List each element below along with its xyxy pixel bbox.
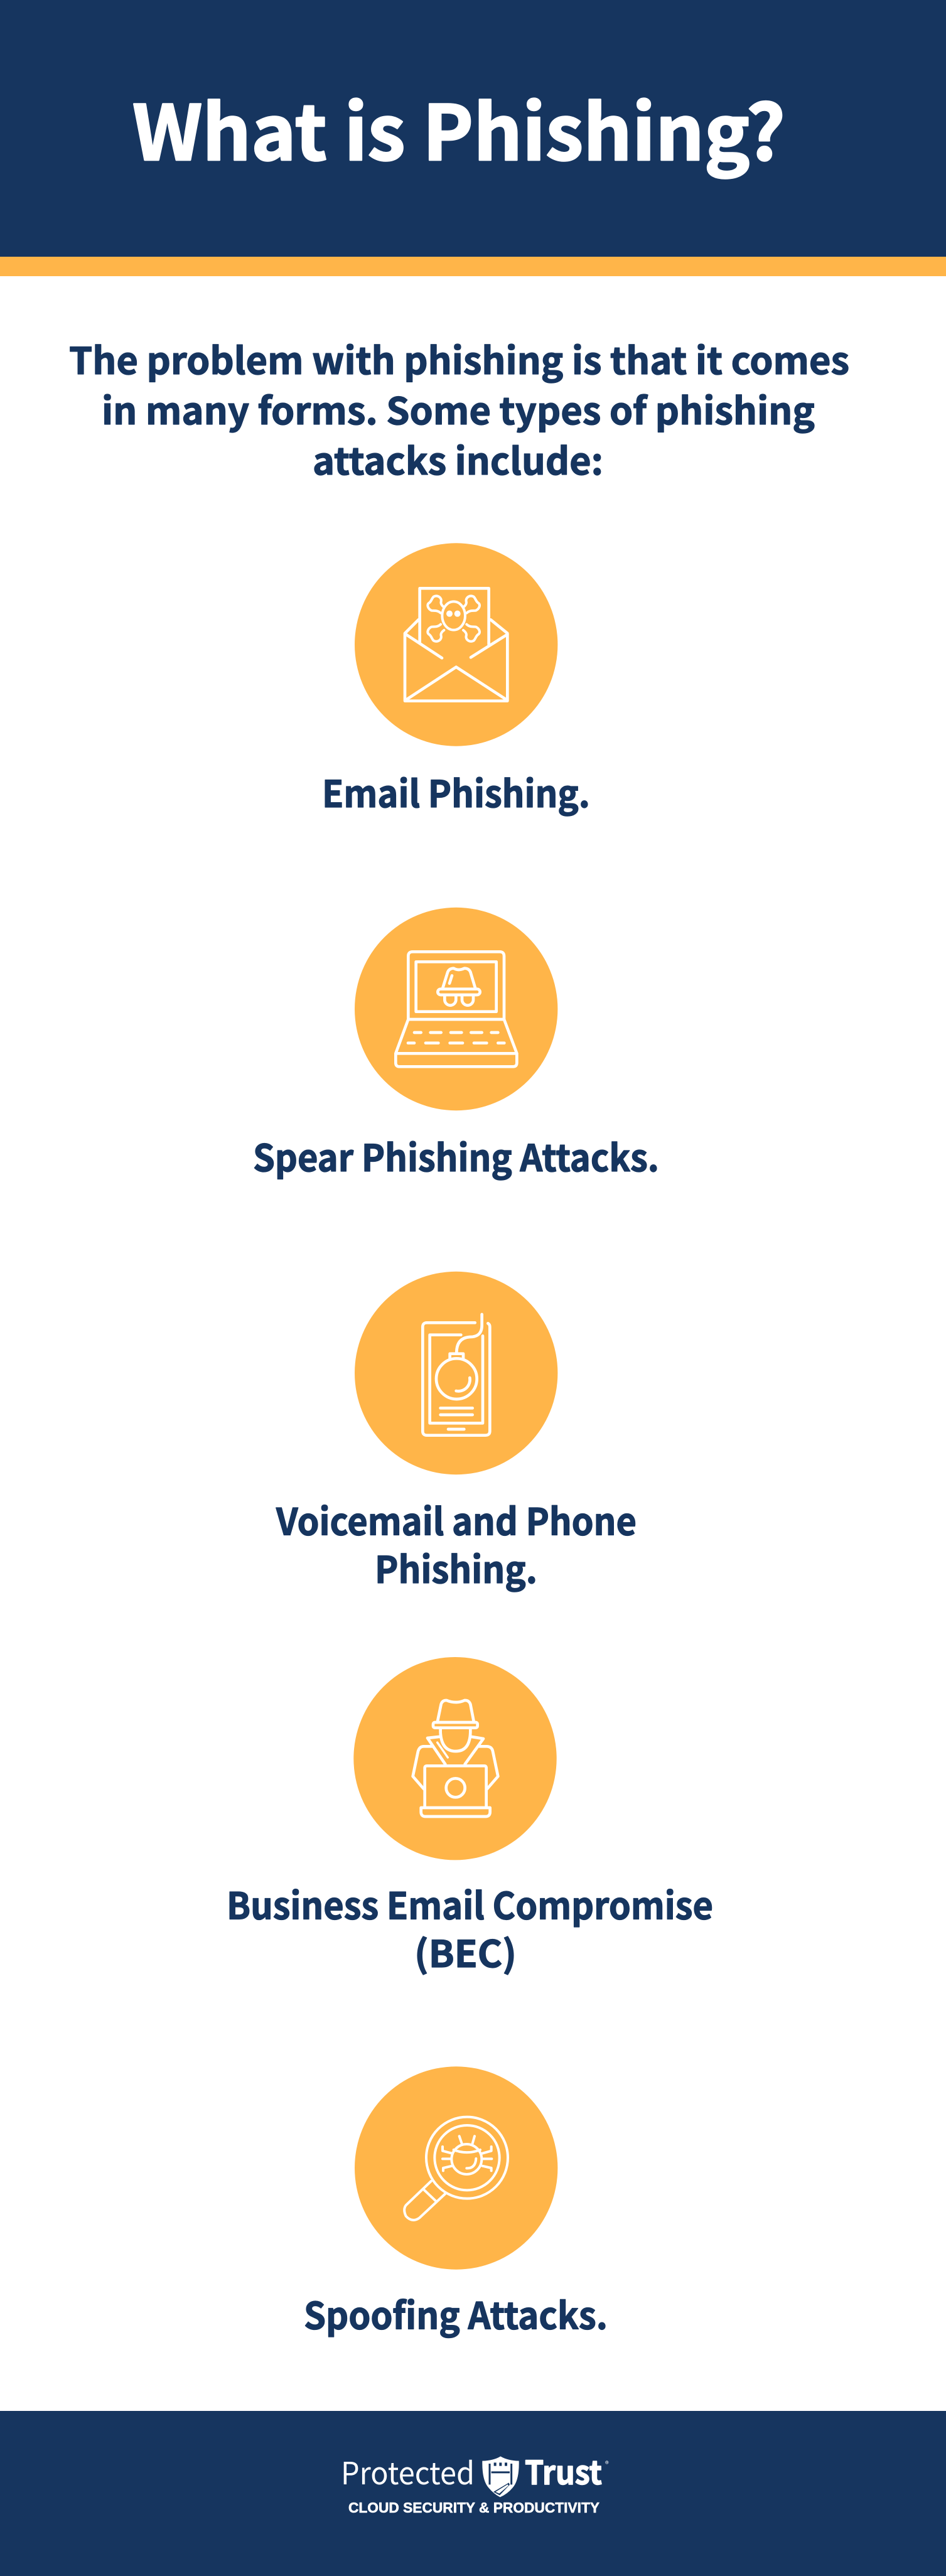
icon: magnifying glass with bug [355,2066,557,2270]
icon: envelope with skull letter [355,543,557,746]
intro text [69,331,849,485]
item: voicemail and phone phishing [276,1272,637,1594]
label: Business Email Compromise [227,1877,713,1929]
icon: phone with bomb [355,1272,557,1474]
registered mark: ® [605,2459,609,2469]
label: Phishing. [375,1540,537,1594]
label: Spoofing Attacks. [304,2287,608,2340]
orange accent stripe [0,257,946,276]
label: Spear Phishing Attacks. [253,1129,659,1182]
tagline: CLOUD SECURITY & PRODUCTIVITY [348,2499,599,2516]
footer band [0,2411,946,2576]
item: email phishing [322,543,590,818]
intro text: in many forms. Some types of phishing [102,382,815,435]
label [276,1493,637,1594]
label: Voicemail and Phone [276,1493,637,1545]
icon: laptop with hat and glasses [355,908,557,1110]
icon: shield with castle tower [482,2456,519,2497]
label [227,1877,713,1978]
title: What is Phishing? [132,72,785,182]
item: business email compromise [227,1657,713,1978]
header band [0,0,946,257]
label: (BEC) [414,1924,517,1978]
item: spear phishing [253,908,659,1182]
item: spoofing attacks [304,2066,608,2340]
wordmark: Trust: Trust [525,2447,602,2494]
intro text: The problem with phishing is that it comes [69,331,849,385]
label: Email Phishing. [322,765,590,818]
icon: hacker at laptop [353,1657,557,1860]
intro text: attacks include: [313,432,603,485]
logo [341,2447,609,2516]
wordmark: Protected: Protected [341,2449,475,2494]
